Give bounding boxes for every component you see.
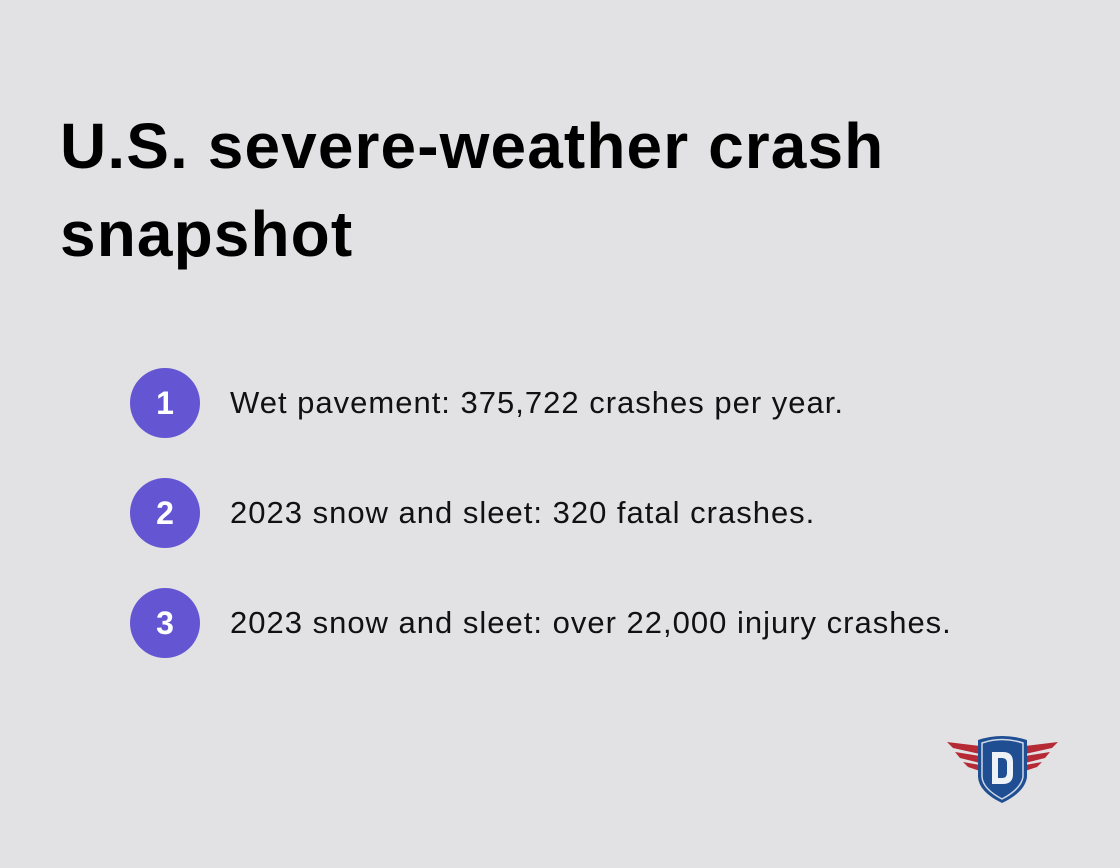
title: snapshot [60, 198, 353, 270]
text 2: 2023 snow and sleet: 320 fatal crashes. [230, 495, 815, 530]
number badge 1 [130, 368, 200, 438]
item 2 [130, 478, 815, 548]
item 1 [130, 368, 844, 438]
item 3 [130, 588, 952, 658]
icon: shield logo [947, 736, 1058, 803]
number badge 2: 2 [156, 495, 174, 531]
number badge 2 [130, 478, 200, 548]
number badge 3: 3 [156, 605, 174, 641]
text 3: 2023 snow and sleet: over 22,000 injury crashes. [230, 605, 952, 640]
title: U.S. severe-weather crash [60, 110, 884, 182]
text 1: Wet pavement: 375,722 crashes per year. [230, 385, 844, 420]
title [60, 110, 884, 270]
number badge 3 [130, 588, 200, 658]
number badge 1: 1 [156, 385, 174, 421]
